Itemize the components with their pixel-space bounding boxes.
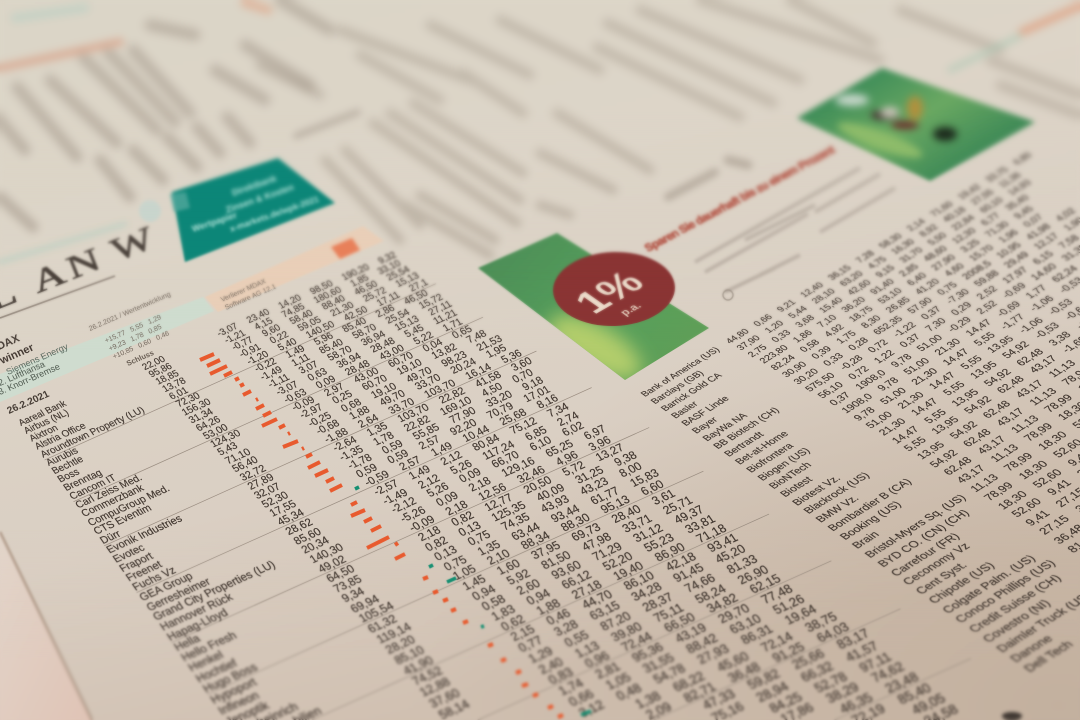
table rows: 44,80 0,66 9,21 12,40 36,15 7,28 58,30 2,14 71,60 19,42 33,75 6,80 [724, 151, 1034, 345]
page edge shadow [0, 532, 92, 720]
far text columns top left [0, 0, 330, 227]
advert logo corner [170, 192, 190, 212]
badge value: 1% [565, 264, 653, 320]
table rows: 0,77 3,28 63,15 34,28 91,45 45,20 [515, 542, 748, 655]
masthead with large lettering [0, 219, 160, 318]
table rows: 2,15 0,46 44,70 86,10 42,18 93,41 [508, 531, 741, 644]
advert text: Wertpapier [191, 210, 239, 234]
table rows: 17,55 [267, 498, 299, 519]
table rows: Hella [172, 632, 203, 654]
band text: 26.2.2021 / Wertentwicklung [88, 291, 172, 333]
table rows: 85,60 [292, 526, 324, 547]
table rows: Bristol-Myers Sq. (US) [863, 493, 969, 560]
table rows: -0,59 2,57 1,49 10,44 25,68 8,16 [362, 393, 561, 489]
table rows: 1,38 68,22 45,60 72,14 38,75 [632, 609, 840, 711]
table rows: 52,30 [260, 490, 291, 511]
band text: +15,77 5,55 1,29 [104, 314, 163, 345]
table rows: Ceconomy Vz [900, 541, 973, 587]
table rows: 64,50 [324, 563, 357, 585]
table rows: Dell Tech [1021, 639, 1076, 674]
band text: Software AG 12,1 [224, 283, 277, 312]
table rows: 20,34 [299, 535, 332, 556]
table rows: -0,22 1,49 5,96 85,40 2,86 46,50 [252, 288, 431, 375]
green rectangle [478, 233, 709, 380]
table rows: 3,12 0,48 54,78 27,93 86,31 19,64 [576, 602, 819, 720]
orange highlight in band [331, 238, 360, 259]
table rows: 0,82 0,13 125,35 40,09 31,25 9,38 [423, 449, 639, 554]
table rows: 0,94 5,92 81,50 47,98 33,71 25,71 [469, 493, 695, 603]
table rows: 30,90 0,39 1,75 8,30 26,85 41,20 4,60 15,70 1,96 0,07 [780, 213, 1046, 379]
table rows: 119,14 [374, 620, 414, 646]
table rows: 156,30 [180, 397, 214, 418]
table rows: 30,20 0,33 0,28 652,35 57,90 0,75 2008,5 10,95 41,98 4,02 [792, 207, 1079, 387]
table rows: 0,66 1,05 31,55 88,42 63,10 51,26 [565, 591, 807, 709]
table rows: 2,18 0,82 12,77 20,50 5,72 13,27 [416, 441, 627, 544]
table rows: Hochtief [193, 656, 240, 685]
photo background [797, 68, 1035, 181]
green market bars [355, 487, 591, 715]
table rows: 1,83 0,94 66,12 52,20 55,23 33,81 [488, 512, 718, 623]
table rows: -2,57 1,49 2,12 80,84 75,12 7,34 [371, 401, 571, 498]
table rows: Blackrock (US) [801, 471, 872, 516]
table rows: 22,00 [140, 354, 168, 373]
table rows: 0,58 2,60 93,60 71,29 31,12 49,37 [479, 502, 707, 613]
table rows: -1,20 5,40 140,50 42,50 17,11 27,1 [245, 277, 431, 367]
advert text: x-markets.de/wpk-2021 [229, 194, 320, 234]
table rows: Conoco Phillips (US) [952, 557, 1059, 625]
advert logo [139, 200, 161, 222]
table rows: Bayer [690, 416, 721, 436]
table rows: 223,80 1,86 7,10 36,20 91,40 2,85 48,60 12,30 6,77 35,40 [757, 193, 1032, 365]
table rows: 0,75 1,35 63,44 93,44 61,77 15,83 [441, 466, 662, 573]
table rows: 575,50 -0,28 0,72 -1,22 0,37 -7,30 59,88 29,49 12,17 1,90 [803, 216, 1080, 394]
picture: green sports photo [797, 68, 1035, 181]
date: 26.2.2021 [5, 389, 52, 417]
table rows: BYD CO. (CN) (CH) [876, 508, 972, 569]
table rows: CompuGroup Med. [86, 484, 172, 529]
table rows: -1,78 0,59 55,85 77,90 33,20 9,18 [345, 375, 546, 472]
table rows: 1,74 2,81 95,36 43,19 29,70 77,48 [555, 581, 795, 698]
table rows: 37,60 [426, 686, 463, 710]
table rows: 5,43 [216, 441, 240, 458]
table rows: -1,49 1,11 85,40 58,70 25,54 15,72 [258, 292, 446, 383]
table rows: Brenntag [62, 468, 105, 494]
table row rules [45, 189, 971, 720]
table rows: Colgate Palm. (US) [939, 553, 1038, 616]
table rows: 71,10 [223, 447, 253, 467]
teal box [172, 158, 335, 262]
table rows: 56,40 [230, 454, 261, 475]
left page under the fold [0, 532, 92, 720]
table rows: Cancom IT [68, 473, 119, 502]
table rows: -1,11 3,07 58,70 36,94 15,13 27,11 [266, 299, 455, 390]
table rows: 2,09 82,71 36,48 91,25 64,03 [643, 619, 852, 720]
table rows: -3,07 23,40 14,20 98,50 190,20 9,32 [215, 250, 399, 339]
table rows: Boss [56, 467, 82, 485]
panel: teal advert [139, 158, 335, 262]
table rows: Aareal Bank [16, 399, 69, 429]
table rows: 0,62 1,88 27,18 19,40 86,90 71,18 [498, 521, 729, 634]
table rows: 0,59 0,59 2,57 92,20 70,79 17,01 [354, 384, 553, 480]
table rows [16, 165, 961, 720]
table rows: CTS Eventim [91, 502, 154, 537]
table rows: -0,63 0,09 28,48 43,00 5,22 1,71 [282, 317, 465, 406]
table rows: Biotest Vz. [790, 474, 843, 508]
table rows: 49,05 [909, 691, 949, 717]
table rows: 85,10 [391, 643, 427, 667]
table rows: 124,30 [208, 428, 243, 450]
table rows: Airbus (NL) [22, 408, 71, 436]
table rows: 1,05 2,10 88,34 88,30 95,13 6,60 [450, 477, 667, 583]
table rows: Bertrandt [722, 430, 767, 459]
table rows: Bechtle [50, 454, 86, 477]
dark object at bottom edge [1002, 712, 1022, 720]
table rows: Barclays (GB) [649, 369, 706, 405]
table rows: 56,10 0,72 1,22 0,37 7,30 0,29 2,52 17,97 6,15 7,58 [816, 233, 1080, 400]
table rows: Credit Suisse (CH) [966, 572, 1064, 635]
table rows: 41,90 [400, 653, 436, 678]
table rows: 0,83 0,96 72,44 66,50 34,82 62,15 [545, 571, 784, 687]
table rows: 53,00 [201, 422, 231, 442]
table rows: 2,40 1,13 39,80 75,11 58,24 26,90 [536, 563, 771, 677]
table rows: 31,34 [187, 407, 216, 426]
table rows: -1,88 2,64 33,70 103,70 16,14 5,36 [322, 347, 525, 446]
table rows: -1,21 4,15 74,85 180,60 1,85 33,10 [222, 258, 403, 346]
table rows: -5,26 0,09 2,18 129,16 65,25 6,97 [398, 423, 609, 525]
table rows: Barrick Gold CA [659, 371, 724, 413]
table rows: BASF Linde [679, 394, 732, 428]
red market bars [200, 354, 563, 717]
table rows: BayWa NA [701, 412, 750, 443]
table rows: Danone [1007, 633, 1056, 664]
table rows: -0,09 2,18 12,56 32,46 4,96 3,96 [407, 435, 614, 535]
table rows: -2,97 0,25 60,70 19,10 13,82 7,48 [298, 329, 489, 421]
table rows: Biogen (US) [756, 446, 813, 483]
table rows: -2,64 1,35 103,70 22,82 41,58 3,60 [330, 355, 535, 454]
photo subject [835, 94, 957, 164]
table rows: 32,72 [238, 463, 269, 484]
table rows: Aroundtown Property (LU) [38, 405, 147, 460]
masthead rule [0, 276, 115, 318]
table rows: 46,35 23,48 [837, 669, 921, 716]
table rows: GEA Group [137, 571, 195, 604]
badge small label: p.a. [618, 301, 644, 318]
table rows: Hypoport [208, 675, 259, 706]
table rows: Hapag-Lloyd [165, 607, 230, 644]
table rows: Hannover Rück [158, 592, 235, 633]
table rows: -1,49 2,12 5,26 117,24 6,85 2,74 [380, 410, 582, 507]
table rows: 61,32 [365, 612, 400, 636]
table rows: Brain [850, 530, 882, 551]
table rows: 13,78 [160, 376, 188, 395]
article text block below headline [695, 168, 895, 292]
table rows: 64,26 [194, 414, 223, 434]
panel: peach losers band [205, 226, 384, 312]
maroon badge [552, 250, 676, 328]
band text: Verlierer MDAX [220, 278, 267, 304]
table rows: Covestro (NI) [980, 597, 1054, 645]
table rows: -0,09 2,97 43,00 60,70 0,04 0,65 [290, 324, 475, 414]
far text columns top centre [260, 0, 1080, 255]
band text: +10,85 0,60 0,46 [112, 330, 171, 361]
table rows: 2,75 0,33 3,68 15,40 42,60 9,15 31,70 5,50 22,84 60,10 14,93 [745, 178, 1033, 359]
table rows: Dürr [98, 528, 123, 547]
table rows: -3,07 0,63 36,94 28,48 5,45 11,21 [274, 308, 460, 398]
yellow-green highlight [542, 305, 650, 380]
table rows: -0,91 0,22 59,05 21,30 25,72 15,13 [237, 271, 422, 360]
table rows: Grand City Properties (LU) [151, 559, 278, 623]
table rows: Carl Zeiss Med. [74, 473, 145, 511]
table rows: Aurubis [44, 446, 81, 468]
picture: green promo box [478, 233, 709, 392]
table rows: 1,45 1,60 37,95 69,73 28,40 3,61 [459, 486, 678, 593]
section heading blocks [296, 112, 748, 197]
table rows: Evonik Industries [104, 513, 185, 556]
table rows: Hugo Boss [200, 660, 260, 695]
table rows: 140,30 [308, 542, 346, 566]
table rows: Freenet [124, 559, 165, 584]
table rows: 28,62 [283, 517, 315, 538]
table rows: 84,25 52,78 97,11 [766, 649, 894, 716]
red headline: Sparen Sie dauerhaft bis zu einem Prozent [643, 144, 838, 254]
table rows: 82,24 0,58 4,92 18,75 53,10 6,40 27,90 3,25 71,30 9,45 [769, 205, 1036, 372]
advert text: Zinsen & Kosten [225, 182, 295, 215]
coloured top accents [0, 3, 1080, 262]
table rows: Bank of America (US) [639, 345, 722, 398]
table rows: -0,68 1,88 49,70 33,70 20,24 1,95 [313, 342, 509, 437]
table rows: Biotest [778, 475, 815, 499]
table rows: 27,89 [245, 472, 276, 492]
column header: Schluss [125, 348, 155, 368]
table rows: 28,20 [383, 633, 418, 657]
table rows: Basler [669, 400, 701, 421]
heading: DAX winners list [0, 332, 155, 417]
table rows: Hello Fresh [179, 629, 239, 664]
table rows: Fuchs Vz [130, 565, 178, 593]
table rows: Commerzbank [79, 483, 146, 519]
table: left stock listing [16, 149, 998, 720]
table rows: 32,07 [252, 481, 283, 502]
table rows: 49,02 [316, 554, 349, 576]
table rows: Biofrontera [745, 442, 796, 475]
table rows: 72,30 [174, 391, 203, 410]
table rows: 105,54 [356, 599, 397, 625]
table rows: Fraport [117, 551, 156, 575]
table rows: Carrefour (FR) [889, 532, 963, 579]
table rows: Bet-at-Home [733, 430, 791, 467]
table rows: 1,29 0,55 87,20 28,37 74,66 81,33 [526, 552, 760, 666]
icon: small euro mark [723, 290, 733, 300]
table rows: 0,13 0,75 74,35 43,93 43,23 8,00 [432, 460, 645, 563]
table rows: 12,88 [417, 675, 453, 699]
table rows: 73,85 [331, 573, 364, 595]
band text: +9,23 1,78 0,85 [108, 324, 163, 353]
table rows: 95,86 [147, 361, 175, 380]
table: right stock listing [639, 151, 1080, 674]
table rows: Chipotle (US) [925, 560, 998, 606]
table rows: 18,85 [153, 368, 181, 387]
table rows: Gerresheimer [144, 576, 213, 614]
panel: mint winners band [0, 297, 214, 402]
band text [88, 278, 277, 361]
table rows: BioNTech [767, 461, 814, 491]
table rows: Bombardier B (CA) [826, 477, 915, 533]
table rows: Evotec [111, 542, 147, 565]
table rows: -0,77 9,60 58,40 88,40 46,50 25,54 [230, 264, 413, 353]
table rows: -1,35 1,78 22,82 169,10 4,50 0,70 [337, 367, 536, 463]
table rows: 69,94 [347, 592, 382, 616]
table rows: Aixtron [27, 423, 60, 444]
table rows: Infineon [215, 688, 262, 718]
advert text [191, 173, 320, 234]
table rows: 9,34 [339, 585, 368, 605]
winner entries: Siemens Energy [4, 341, 70, 377]
table rows: BB Biotech (CH) [711, 406, 782, 451]
table rows: 6,01 [167, 385, 191, 402]
table rows: BMW Vz. [813, 493, 862, 525]
table rows: 74,52 [409, 664, 445, 688]
table rows: 37,90 1,20 5,44 28,10 63,20 4,75 16,30 8,92 40,18 27,55 11,36 [734, 171, 1023, 352]
table rows: Booking (US) [838, 500, 904, 542]
table rows: -2,12 5,26 0,09 66,70 6,10 6,02 [389, 420, 587, 516]
table rows [639, 151, 1080, 674]
table rows: 45,34 [275, 507, 307, 528]
table rows: -0,25 0,68 19,10 49,70 98,23 21,53 [306, 334, 505, 430]
table rows: Cent Syst. [912, 559, 970, 597]
table rows: 47,33 59,82 25,66 83,17 [699, 626, 872, 712]
advert text: Direktbank [231, 173, 279, 198]
table rows: Henkel [186, 649, 226, 674]
table rows: Alstria Office [33, 421, 88, 452]
